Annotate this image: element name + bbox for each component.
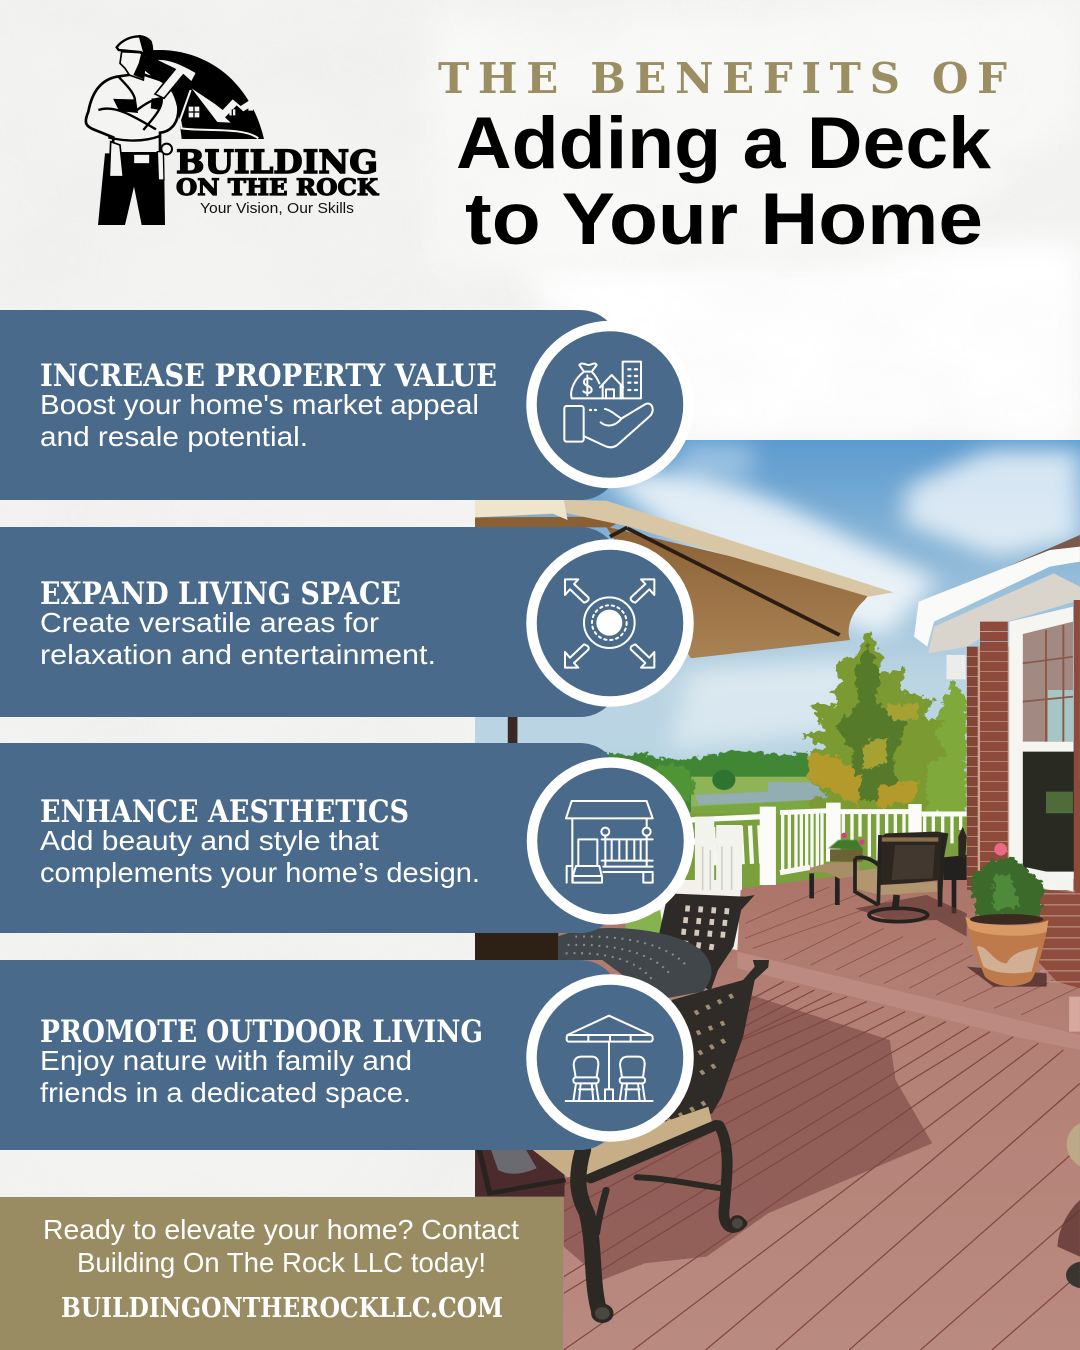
description: complements your home’s design. (40, 857, 480, 888)
dining table (558, 928, 712, 1000)
panel: expand living space (0, 527, 688, 717)
call to action text: Ready to elevate your home? Contact (43, 1214, 519, 1245)
icon: porch (532, 762, 689, 920)
logo: Building On The Rock (86, 35, 379, 225)
flower box (830, 849, 863, 862)
ottoman (812, 873, 837, 905)
logo emblem (86, 35, 264, 225)
terracotta pot (965, 917, 1048, 986)
far planks (745, 887, 1080, 1015)
brick wall (1037, 888, 1080, 988)
description: Enjoy nature with family and (40, 1045, 412, 1076)
planter shadow (967, 967, 1047, 987)
description (40, 1045, 412, 1108)
call to action text (43, 1214, 519, 1278)
logo: Building On The Rock: ON THE ROCK (176, 175, 379, 201)
far dining chair (656, 893, 755, 992)
rail behind table (654, 880, 741, 950)
heading: PROMOTE OUTDOOR LIVING (40, 1014, 483, 1050)
plant (970, 857, 1043, 917)
base area under table (475, 1150, 564, 1197)
near planks (564, 982, 1080, 1350)
panel: enhance aesthetics (0, 743, 689, 933)
logo: Building On The Rock: Your Vision, Our Skills (200, 200, 354, 217)
title: THE BENEFITS OF (438, 54, 1007, 103)
website: BUILDINGONTHEROCKLLC.COM (61, 1293, 503, 1324)
distant landscape (606, 752, 969, 893)
title (438, 54, 1007, 260)
description: Boost your home's market appeal (40, 389, 479, 420)
icon: expanding arrows (532, 544, 688, 702)
umbrella (475, 499, 894, 747)
swivel chair (880, 832, 948, 887)
pine tree (802, 630, 967, 813)
deck photograph (475, 440, 1080, 1350)
title: to Your Home (465, 179, 983, 260)
near rail section (691, 807, 776, 890)
panel: increase property value (0, 310, 688, 500)
description: Add beauty and style that (40, 825, 379, 856)
clouds (602, 443, 1080, 750)
far terrace: rail, chair, planter (780, 780, 1080, 988)
heading: EXPAND LIVING SPACE (40, 576, 401, 612)
heading: INCREASE PROPERTY VALUE (40, 358, 497, 394)
description (40, 825, 480, 888)
description: relaxation and entertainment. (40, 639, 436, 670)
rail balusters (783, 813, 822, 872)
heading: ENHANCE AESTHETICS (40, 794, 409, 830)
icon: patio umbrella and chairs (532, 980, 688, 1136)
description (40, 607, 436, 670)
title: Adding a Deck (456, 103, 991, 184)
table pole (475, 932, 558, 962)
deck floor (475, 860, 1080, 1350)
backdrop behind rail (683, 813, 969, 893)
description: Create versatile areas for (40, 607, 379, 638)
icon: hand holding property (532, 326, 688, 483)
decking (475, 880, 1080, 1350)
logo wordmark: BUILDING (176, 143, 378, 181)
sky (475, 440, 1080, 840)
shadow (564, 995, 932, 1280)
side table (943, 855, 967, 880)
call to action text: Building On The Rock LLC today! (77, 1247, 486, 1278)
house (914, 535, 1080, 890)
description: and resale potential. (40, 421, 308, 452)
near chair (664, 960, 769, 1122)
call to action panel (0, 1197, 563, 1350)
swivel chair shadow (855, 895, 967, 937)
description: friends in a dedicated space. (40, 1077, 411, 1108)
panel: promote outdoor living (0, 960, 688, 1150)
description (40, 389, 479, 452)
right-edge objects (1069, 997, 1080, 1032)
